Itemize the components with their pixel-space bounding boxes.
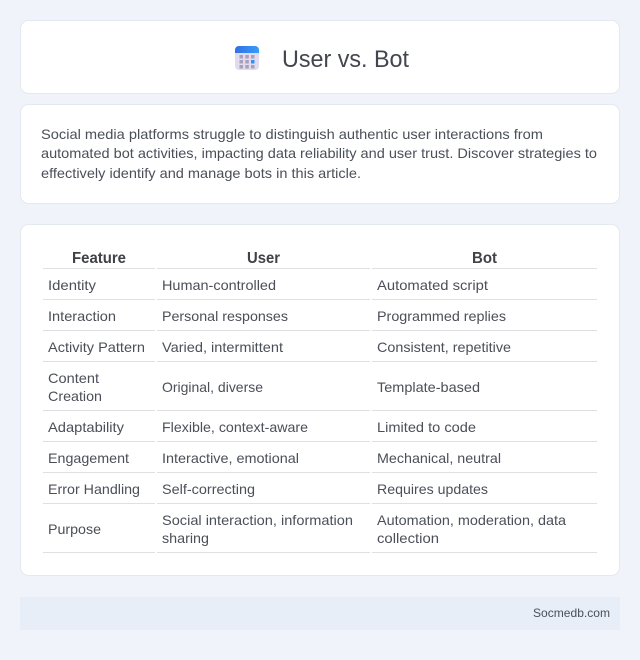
row: activity pattern: Consistent, repetitive xyxy=(377,339,511,355)
row: engagement: Interactive, emotional xyxy=(162,450,299,466)
text block: introduction: automated bot activities, impacting data reliability and user trust. Discover strategies to xyxy=(41,145,597,161)
row: adaptability: Flexible, context-aware xyxy=(162,419,308,435)
row: error handling xyxy=(48,481,488,497)
text block: introduction xyxy=(41,126,597,181)
row: activity pattern xyxy=(48,339,511,355)
panel: title card xyxy=(20,20,620,94)
row: purpose: Automation, moderation, data xyxy=(377,512,566,528)
row: purpose: Purpose xyxy=(48,521,101,537)
row: identity: Human-controlled xyxy=(162,277,276,293)
row: error handling: Requires updates xyxy=(377,481,488,497)
row: purpose: Social interaction, information xyxy=(162,512,353,528)
title: User vs. Bot xyxy=(282,46,409,73)
row: activity pattern: Varied, intermittent xyxy=(162,339,283,355)
icon: calendar xyxy=(235,46,259,70)
row: identity xyxy=(48,277,488,293)
row: identity: Automated script xyxy=(377,277,488,293)
row: purpose xyxy=(48,512,566,546)
row: content creation: Template-based xyxy=(377,379,480,395)
table header: User xyxy=(247,250,280,267)
row: purpose: sharing xyxy=(162,530,209,546)
footer xyxy=(20,597,620,630)
panel: introduction xyxy=(20,104,620,204)
row: identity: Identity xyxy=(48,277,96,293)
row: interaction: Programmed replies xyxy=(377,308,506,324)
panel: comparison table xyxy=(20,224,620,576)
row: content creation: Original, diverse xyxy=(162,379,263,395)
row: interaction xyxy=(48,308,506,324)
table header: Bot xyxy=(472,250,497,267)
row: engagement: Mechanical, neutral xyxy=(377,450,501,466)
footer source text: Socmedb.com xyxy=(533,606,610,620)
row: error handling: Self-correcting xyxy=(162,481,255,497)
row: purpose: collection xyxy=(377,530,439,546)
row: interaction: Personal responses xyxy=(162,308,288,324)
table header xyxy=(72,250,497,267)
row: content creation: Content xyxy=(48,370,99,386)
table header: Feature xyxy=(72,250,126,267)
row: error handling: Error Handling xyxy=(48,481,140,497)
row: content creation xyxy=(48,370,480,404)
row: adaptability: Limited to code xyxy=(377,419,476,435)
row: activity pattern: Activity Pattern xyxy=(48,339,145,355)
row: engagement xyxy=(48,450,501,466)
row: content creation: Creation xyxy=(48,388,102,404)
row: adaptability: Adaptability xyxy=(48,419,124,435)
row: adaptability xyxy=(48,419,476,435)
text block: introduction: effectively identify and manage bots in this article. xyxy=(41,165,361,181)
row: interaction: Interaction xyxy=(48,308,116,324)
text block: introduction: Social media platforms struggle to distinguish authentic user interactions from xyxy=(41,126,543,142)
row: engagement: Engagement xyxy=(48,450,129,466)
